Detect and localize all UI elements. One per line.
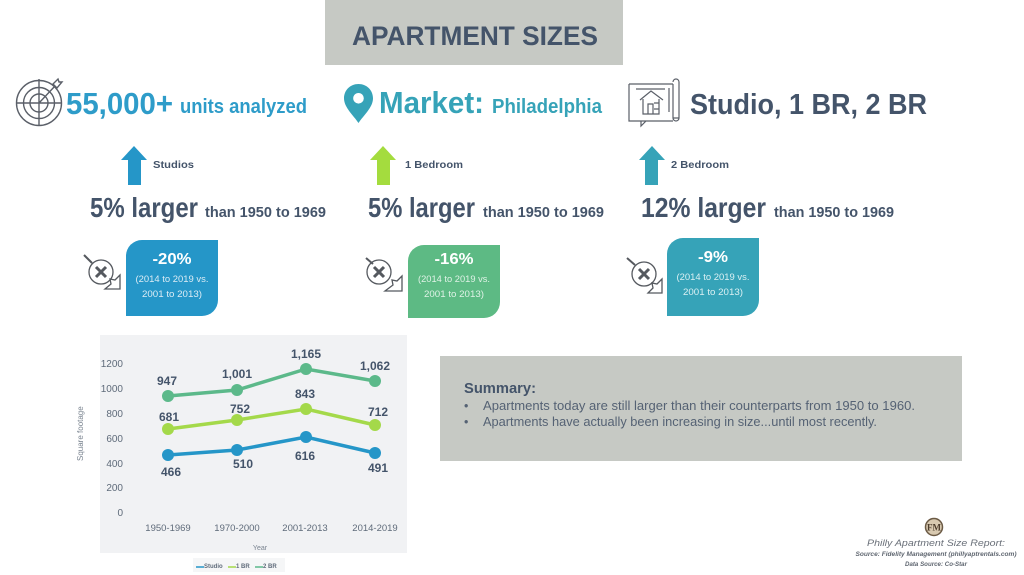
column: 2 bedroom [627,146,894,316]
y axis labels: 800 [106,409,123,420]
chart legend: 1 BR [236,564,250,570]
y axis labels: 1000 [101,384,123,395]
title: APARTMENT SIZES [352,21,598,51]
data labels: 1,001 [222,367,252,381]
panel: summary [440,356,962,461]
stat: studios larger [90,192,326,223]
icon: blueprint [629,79,679,126]
chart legend [193,558,285,572]
x axis labels: 1950-1969 [145,523,191,534]
x axis title: Year [253,545,268,552]
y axis title: Square footage [76,406,85,461]
icon: target [16,79,62,126]
logo: FM [927,522,941,532]
source note: Philly Apartment Size Report: [867,538,1005,549]
x axis labels: 2014-2019 [352,523,398,534]
label: studios: Studios [153,159,194,171]
callout: 2 bedroom change [667,238,759,316]
y axis labels: 1200 [101,359,123,370]
data labels [157,347,390,479]
heading: summary: Summary: [464,381,536,397]
logo [926,518,942,536]
arrow: 1 bedroom up [370,146,396,185]
data labels: 947 [157,374,177,388]
stat: units analyzed: units analyzed [180,96,307,118]
summary bullets [464,399,915,429]
icon: map pin [344,84,373,123]
stat: 1 bedroom larger [368,192,604,223]
stat: studios larger: than 1950 to 1969 [205,204,326,221]
x axis labels [145,523,398,534]
arrow: studios up [121,146,147,185]
y axis labels: 200 [106,483,123,494]
callout: 2 bedroom change: 2001 to 2013) [683,287,743,298]
source note: Source: Fidelity Management (phillyaptrentals.com) [856,551,1016,558]
data labels: 1,062 [360,359,390,373]
stat: market: Philadelphia [492,96,603,118]
chart legend: Studio [204,564,223,570]
icon: decrease [84,255,120,289]
callout: 1 bedroom change: 2001 to 2013) [424,289,484,300]
data labels: 616 [295,449,315,463]
data labels: 466 [161,465,181,479]
data labels: 491 [368,461,388,475]
data labels: 1,165 [291,347,321,361]
arrow: 2 bedroom up [639,146,665,185]
callout: studios change [126,240,218,316]
label: 1 bedroom: 1 Bedroom [405,159,463,171]
data labels: 712 [368,405,388,419]
callout: 1 bedroom change: (2014 to 2019 vs. [418,274,490,285]
callout: 1 bedroom change: -16% [434,251,474,268]
stat: market: Market: [379,85,484,120]
y axis labels: 0 [117,508,123,519]
stat: 2 bedroom larger [641,192,894,223]
callout: studios change: (2014 to 2019 vs. [136,274,208,285]
y axis labels: 400 [106,459,123,470]
stat: unit types: Studio, 1 BR, 2 BR [690,89,927,121]
summary bullets: Apartments today are still larger than their counterparts from 1950 to 1960. [483,399,915,413]
callout: studios change: 2001 to 2013) [142,289,202,300]
series: 1 BR [162,403,381,435]
icon: decrease [366,258,402,291]
data labels: 681 [159,410,179,424]
summary bullets: • [464,415,468,429]
column: studios [84,146,326,316]
stat: 1 bedroom larger: 5% larger [368,192,475,223]
icon: decrease [627,258,662,293]
callout: 2 bedroom change: (2014 to 2019 vs. [676,272,750,283]
y axis labels: 600 [106,434,123,445]
label: 2 bedroom: 2 Bedroom [671,159,729,171]
title [325,0,623,65]
callout: 2 bedroom change: -9% [698,249,728,266]
x axis labels: 2001-2013 [282,523,328,534]
stat: 2 bedroom larger: than 1950 to 1969 [774,204,894,221]
stat: 1 bedroom larger: than 1950 to 1969 [483,204,604,221]
stat: units analyzed [66,86,307,121]
chart legend: 2 BR [263,564,277,570]
source note: Data Source: Co-Star [905,561,967,568]
source note [856,538,1016,568]
x axis labels: 1970-2000 [214,523,260,534]
data labels: 843 [295,387,315,401]
series: 2 BR [162,363,381,402]
column: 1 bedroom [366,146,604,318]
callout: studios change: -20% [152,251,192,268]
series: Studio [162,431,381,461]
callout: 1 bedroom change [408,245,500,318]
stat: 2 bedroom larger: 12% larger [641,192,766,223]
data labels: 510 [233,457,253,471]
summary bullets: Apartments have actually been increasing in size...until most recently. [483,415,877,429]
stat: units analyzed: 55,000+ [66,86,173,121]
y axis labels [101,359,123,519]
summary bullets: • [464,399,468,413]
data labels: 752 [230,402,250,416]
stat: studios larger: 5% larger [90,192,198,223]
stat: market [379,85,603,120]
line chart [76,335,407,553]
